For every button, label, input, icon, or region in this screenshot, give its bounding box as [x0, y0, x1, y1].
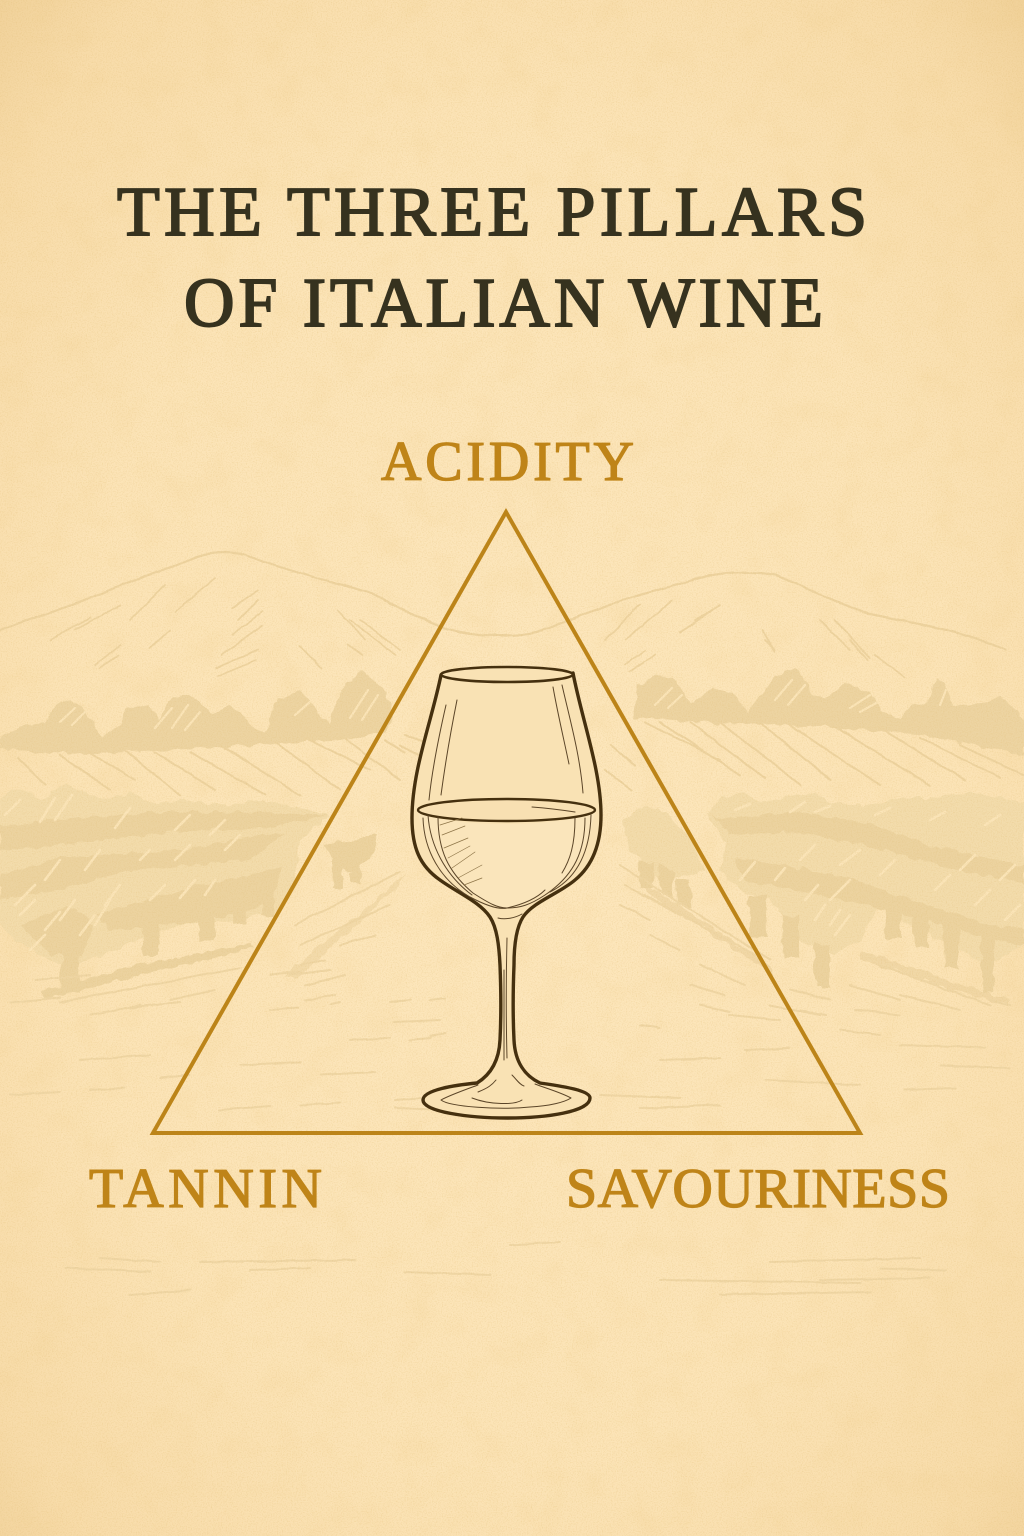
glass silhouette — [412, 673, 601, 1118]
wine body — [418, 812, 595, 908]
label: acidity: ACIDITY — [381, 431, 634, 493]
landscape: hills — [0, 553, 1006, 678]
title — [117, 174, 867, 342]
title line one: THE THREE PILLARS — [117, 174, 867, 251]
landscape: left vineyard rows — [0, 783, 405, 999]
glass rim — [441, 667, 573, 682]
wine glass icon — [412, 667, 601, 1118]
landscape: foreground ground lines — [10, 865, 1010, 1295]
landscape: field furrows — [18, 722, 1024, 795]
landscape: right foliage highlights — [735, 802, 1020, 935]
label: tannin: TANNIN — [89, 1158, 322, 1220]
title line two: OF ITALIAN WINE — [184, 265, 823, 342]
landscape: left foliage highlights — [5, 795, 240, 950]
landscape: right vineyard rows — [622, 793, 1024, 1006]
glass highlights — [423, 685, 591, 1108]
label: savouriness: SAVOURINESS — [566, 1158, 950, 1220]
landscape: tree line hatching — [60, 680, 946, 730]
wine surface — [418, 799, 595, 821]
triangle — [153, 512, 860, 1133]
landscape: distant tree lines — [0, 668, 1024, 756]
